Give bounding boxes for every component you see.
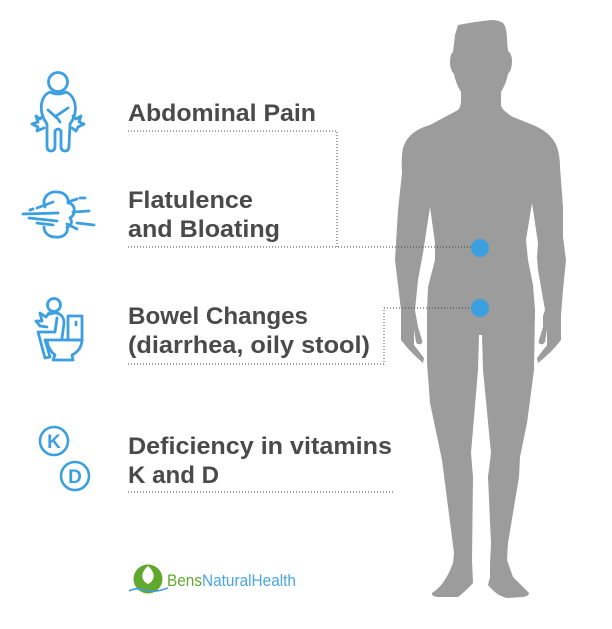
heading: bowel changes <box>128 303 370 359</box>
icon: vitamin K <box>40 427 68 455</box>
heading: bowel changes: Bowel Changes <box>128 303 308 330</box>
icon: person on toilet <box>36 298 82 360</box>
human body silhouette <box>395 20 566 598</box>
heading: abdominal pain: Abdominal Pain <box>128 100 316 127</box>
marker: bowel <box>471 299 489 317</box>
marker: abdomen <box>471 239 489 257</box>
icon: vitamin D <box>61 462 89 490</box>
logo: Bens Natural Health <box>129 564 296 594</box>
icon: abdominal pain person <box>32 72 84 151</box>
heading: flatulence and bloating: and Bloating <box>128 216 280 243</box>
heading: vitamin deficiency: K and D <box>128 462 219 489</box>
heading: flatulence and bloating <box>128 187 280 243</box>
logo: Bens Natural Health: BensNaturalHealth <box>167 571 296 590</box>
icon: flatulence cloud <box>23 192 94 237</box>
icon: vitamin D: D <box>68 467 82 488</box>
heading: bowel changes: (diarrhea, oily stool) <box>128 332 370 359</box>
heading: vitamin deficiency <box>128 433 392 489</box>
dotted leader lines <box>128 131 474 492</box>
icon: vitamin K: K <box>47 432 61 453</box>
heading: flatulence and bloating: Flatulence <box>128 187 253 214</box>
heading: vitamin deficiency: Deficiency in vitamins <box>128 433 392 460</box>
